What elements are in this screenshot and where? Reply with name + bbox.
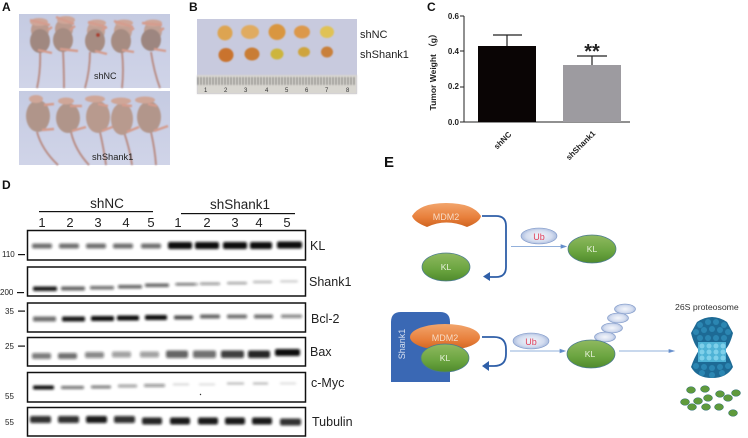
MDM2 ellipse: MDM2 — [432, 333, 458, 343]
lane numbers: 2 — [66, 215, 74, 230]
KL ellipse substrate — [422, 253, 470, 281]
label C: C — [427, 0, 436, 14]
y axis ticks: 0.0 — [448, 118, 460, 127]
lane numbers: 3 — [94, 215, 102, 230]
y axis ticks: 0.4 — [448, 47, 460, 56]
KL ellipse substrate: KL — [441, 262, 451, 272]
lane numbers: 2 — [203, 215, 211, 230]
curved blue arrow — [482, 337, 506, 371]
panel A: mice photos — [2, 0, 170, 165]
marker 55 lower: 55 — [5, 418, 14, 427]
thin arrow to KL — [511, 245, 566, 248]
proteasome icon — [691, 317, 733, 378]
blot label Shank1: Shank1 — [309, 275, 351, 289]
marker 200 — [0, 288, 24, 297]
polyubiquitin chain — [594, 304, 636, 342]
label E: E — [384, 154, 394, 171]
ruler numbers: 1 — [204, 88, 208, 94]
group header shNC: shNC — [90, 196, 124, 211]
blot label KL: KL — [310, 239, 325, 253]
lane numbers: 4 — [122, 215, 130, 230]
KL product ellipse — [568, 235, 616, 263]
label D: D — [2, 178, 11, 192]
blot: Bax — [28, 338, 306, 366]
KL ubiquitinated ellipse: KL — [585, 349, 595, 359]
tumor photo — [197, 19, 357, 94]
ruler numbers: 4 — [265, 88, 269, 94]
Ub ellipse: Ub — [533, 232, 545, 242]
bar: shNC — [478, 35, 536, 122]
group header shShank1 — [181, 197, 295, 214]
Ub ellipse — [513, 333, 549, 349]
marker 35: 35 — [5, 307, 14, 316]
group header shShank1: shShank1 — [210, 197, 270, 212]
row label shNC: shNC — [360, 29, 388, 41]
proteasome title: 26S proteosome — [675, 302, 739, 312]
MDM2 crescent — [412, 203, 481, 227]
blot label c-Myc: c-Myc — [311, 376, 344, 390]
y axis ticks: 0.6 — [448, 12, 460, 21]
curved blue arrow — [482, 216, 506, 281]
blot: c-Myc — [28, 372, 306, 402]
KL product ellipse: KL — [587, 244, 597, 254]
ruler numbers: 7 — [325, 88, 329, 94]
thin arrow to proteasome — [619, 350, 674, 352]
bottom pathway — [391, 302, 740, 416]
ruler numbers: 5 — [285, 88, 289, 94]
x label shNC: shNC — [492, 130, 514, 151]
KL ellipse bound: KL — [440, 353, 450, 363]
x label shShank1: shShank1 — [564, 129, 598, 162]
blot label Bcl-2: Bcl-2 — [311, 312, 340, 326]
photo: shShank1 mice — [19, 91, 170, 165]
panel E: mechanism diagram — [384, 154, 740, 416]
Shank1 scaffold — [391, 312, 450, 382]
photo label shShank1: shShank1 — [92, 152, 133, 162]
row label shShank1: shShank1 — [360, 49, 409, 61]
blot label Bax: Bax — [310, 345, 332, 359]
blot: KL — [28, 230, 306, 260]
lane numbers: 1 — [38, 215, 46, 230]
degraded peptide fragments — [680, 386, 740, 416]
marker 55: 55 — [5, 392, 14, 401]
marker 25: 25 — [5, 342, 14, 351]
marker 35 — [5, 307, 25, 316]
blot label Tubulin: Tubulin — [312, 415, 353, 429]
label A: A — [2, 0, 11, 14]
lane numbers: 5 — [283, 215, 291, 230]
ruler numbers: 2 — [224, 88, 228, 94]
MDM2 crescent: MDM2 — [433, 212, 459, 222]
significance stars: ** — [584, 41, 600, 63]
photo label shNC: shNC — [94, 71, 117, 81]
blot: Shank1 — [28, 267, 306, 296]
Shank1 scaffold: Shank1 — [397, 329, 407, 359]
thin arrow to ubiquitinated KL — [510, 349, 565, 353]
KL ellipse bound — [421, 344, 469, 372]
top pathway — [412, 203, 616, 281]
blot: Tubulin — [28, 408, 306, 436]
group header shNC — [39, 196, 153, 212]
lane numbers: 4 — [255, 215, 263, 230]
panel B: tumor photo — [189, 0, 409, 94]
marker 200: 200 — [0, 288, 14, 297]
panel D: western blots — [0, 178, 353, 436]
Ub ellipse: Ub — [525, 337, 537, 347]
marker 110: 110 — [2, 250, 15, 259]
marker 25 — [5, 342, 25, 351]
y axis title: Tumor Weight （g） — [428, 30, 438, 110]
lane numbers: 5 — [147, 215, 155, 230]
y axis ticks: 0.2 — [448, 82, 460, 91]
lane numbers: 3 — [231, 215, 239, 230]
bar: shShank1 — [563, 56, 621, 122]
ruler numbers: 8 — [346, 88, 350, 94]
ruler numbers: 3 — [244, 88, 248, 94]
Ub ellipse — [521, 228, 557, 244]
lane numbers: 1 — [174, 215, 182, 230]
photo: shNC mice — [19, 14, 170, 88]
marker 110 — [2, 250, 25, 259]
panel C: tumor weight bar chart — [427, 0, 630, 162]
blot: Bcl-2 — [28, 303, 306, 332]
label B: B — [189, 0, 198, 14]
ruler numbers: 6 — [305, 88, 309, 94]
MDM2 ellipse — [410, 324, 480, 350]
KL ubiquitinated ellipse — [567, 340, 615, 368]
